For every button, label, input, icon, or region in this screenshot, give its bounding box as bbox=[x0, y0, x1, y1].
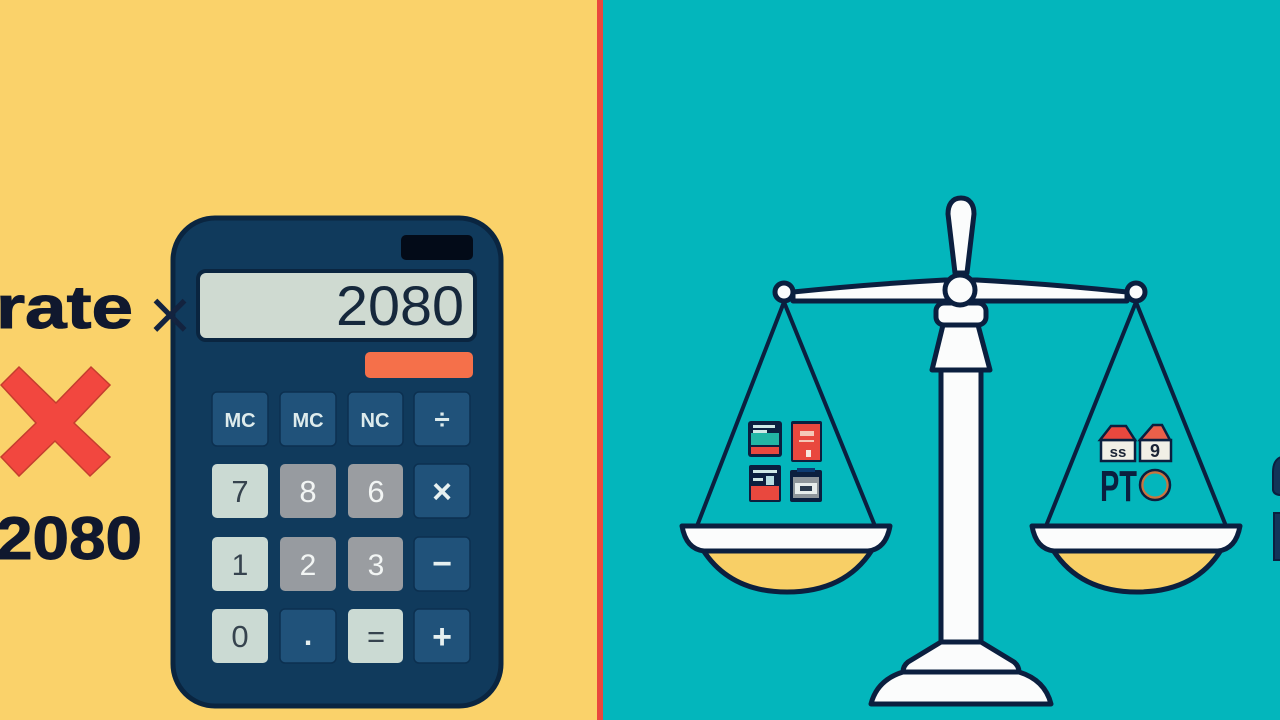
key MC bbox=[212, 392, 268, 446]
text: multiplication sign overlapping calculator: × bbox=[148, 273, 192, 356]
right pivot bbox=[1127, 283, 1145, 301]
house right glyph: 9 bbox=[1150, 441, 1160, 461]
key 6: 6 bbox=[367, 474, 385, 509]
key minus bbox=[414, 537, 470, 591]
key NC bbox=[348, 392, 403, 446]
document red bbox=[791, 421, 822, 462]
display bbox=[198, 271, 475, 340]
left strings bbox=[697, 302, 875, 526]
key 2 bbox=[280, 537, 336, 591]
key divide: ÷ bbox=[434, 404, 450, 435]
key 3 bbox=[348, 537, 403, 591]
key multiply bbox=[414, 464, 470, 518]
key minus: − bbox=[432, 545, 452, 583]
key 6 bbox=[348, 464, 403, 518]
scale beam bbox=[793, 280, 1127, 301]
red vertical divider bbox=[597, 0, 603, 720]
key multiply: × bbox=[432, 473, 452, 511]
panel: yellow left background bbox=[0, 0, 598, 720]
key 2: 2 bbox=[300, 549, 316, 582]
house left glyph: ss bbox=[1110, 444, 1126, 461]
key 0: 0 bbox=[231, 619, 249, 654]
centre pivot bbox=[945, 275, 975, 305]
partial icon upper bbox=[1273, 457, 1280, 495]
key NC: NC bbox=[361, 410, 389, 432]
right strings bbox=[1046, 302, 1226, 526]
letter O ring bbox=[1142, 472, 1168, 498]
key MC second bbox=[280, 392, 336, 446]
scale neck bbox=[932, 325, 990, 370]
letter O outline bbox=[1140, 470, 1170, 500]
keypad bbox=[212, 392, 470, 663]
key 1 bbox=[212, 537, 268, 591]
solar panel bbox=[401, 235, 473, 260]
key 1: 1 bbox=[232, 549, 248, 582]
right pan bbox=[1032, 526, 1240, 551]
display: 2080 bbox=[336, 274, 464, 337]
key 7: 7 bbox=[231, 474, 249, 509]
key plus: + bbox=[432, 618, 452, 656]
right bowl bbox=[1053, 550, 1221, 592]
scale finial bbox=[948, 198, 974, 273]
key MC: MC bbox=[224, 410, 256, 432]
document grey bbox=[790, 468, 822, 502]
key 3: 3 bbox=[368, 549, 384, 582]
key equals: = bbox=[367, 619, 385, 654]
left pan bbox=[682, 526, 890, 551]
text: PTO: PT bbox=[1100, 462, 1137, 511]
key divide bbox=[414, 392, 470, 446]
key 8 bbox=[280, 464, 336, 518]
icon: red cross bbox=[1, 367, 110, 476]
key 7 bbox=[212, 464, 268, 518]
orange key bbox=[365, 352, 473, 378]
calculator body bbox=[173, 218, 501, 706]
icons: houses and PTO in right pan bbox=[1100, 425, 1171, 511]
left pivot bbox=[775, 283, 793, 301]
partial icon lower bbox=[1274, 513, 1280, 560]
scale collar bbox=[936, 303, 986, 325]
key 8: 8 bbox=[299, 474, 317, 509]
partial icon at right edge bbox=[1273, 457, 1280, 560]
key point bbox=[280, 609, 336, 663]
calculator bbox=[173, 218, 501, 706]
key MC second: MC bbox=[292, 410, 324, 432]
key plus bbox=[414, 609, 470, 663]
document blue and red bbox=[749, 465, 781, 502]
document teal bbox=[748, 421, 782, 457]
scale column bbox=[941, 370, 981, 642]
text: 2080 formula value: 2080 bbox=[0, 505, 142, 572]
scale base upper bbox=[903, 642, 1019, 672]
balance scale bbox=[682, 198, 1240, 704]
key equals bbox=[348, 609, 403, 663]
key point: . bbox=[304, 619, 312, 652]
left bowl bbox=[703, 550, 872, 592]
scale base lower bbox=[871, 672, 1051, 704]
house left bbox=[1100, 426, 1135, 461]
icons: four documents in left pan bbox=[748, 421, 822, 502]
panel: teal right background bbox=[602, 0, 1280, 720]
key 0 bbox=[212, 609, 268, 663]
house right bbox=[1140, 425, 1171, 461]
